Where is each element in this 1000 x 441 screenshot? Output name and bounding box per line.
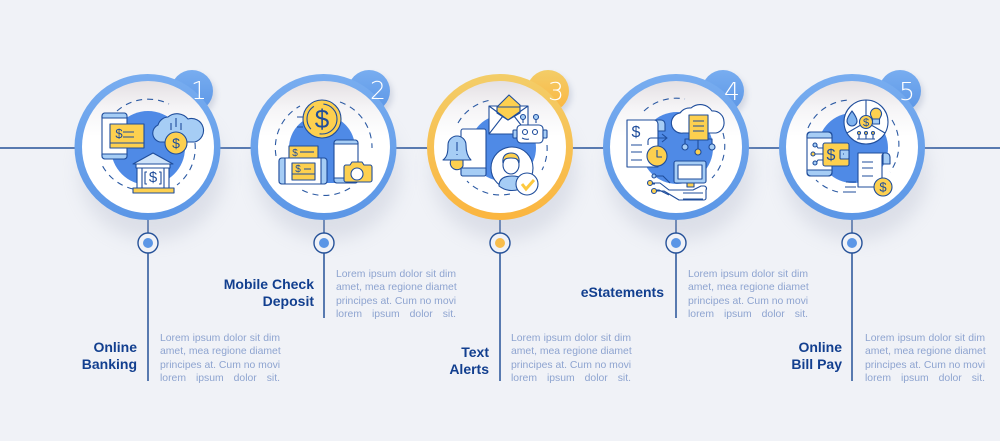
text block: Mobile Check Deposit: lorem ipsum dolor sit.	[336, 309, 456, 320]
timeline marker 2	[314, 233, 334, 253]
text block: Online Bill Pay: lorem ipsum dolor sit.	[865, 373, 985, 384]
text block: Online Banking	[160, 333, 281, 384]
step 2 circle: Mobile Check Deposit: $	[315, 104, 330, 134]
timeline marker 1	[138, 233, 158, 253]
step 3 circle: Text Alerts: 3	[548, 77, 564, 106]
step 2 circle: Mobile Check Deposit: $	[295, 164, 301, 175]
heading: Mobile Check Deposit: Deposit	[263, 292, 314, 308]
step 4 circle: eStatements: $	[632, 124, 641, 141]
step 5 circle: Online Bill Pay: 5	[899, 77, 915, 106]
text block: Online Bill Pay: amet, mea regione diamet	[865, 346, 986, 357]
step 1 circle: Online Banking: 1	[191, 76, 207, 105]
icon: coin, check, phones and camera	[279, 100, 372, 184]
text block: Online Bill Pay: principes at. Cum no movi	[865, 360, 985, 371]
text block: Online Bill Pay	[865, 333, 986, 384]
step 3 circle: Text Alerts	[427, 70, 576, 240]
icon: phone, card, cloud coin and bank	[102, 113, 204, 193]
step 4 circle: eStatements: 4	[724, 77, 740, 106]
text block: Mobile Check Deposit: amet, mea regione diamet	[336, 282, 457, 293]
step 2 circle: Mobile Check Deposit: $	[292, 148, 298, 159]
text block: eStatements: amet, mea regione diamet	[688, 282, 809, 293]
icon: envelope, bell, phone, robot and person	[443, 95, 547, 195]
step 1 circle: Online Banking: $	[172, 135, 180, 151]
heading: Text Alerts	[449, 344, 489, 376]
text block: Text Alerts	[511, 333, 632, 384]
timeline marker 3	[490, 233, 510, 253]
heading: Online Bill Pay: Bill Pay	[791, 356, 842, 372]
text block: eStatements: principes at. Cum no movi	[688, 296, 808, 307]
heading: Online Banking	[82, 339, 137, 372]
text block: Text Alerts: Lorem ipsum dolor sit dim	[511, 333, 631, 344]
text block: Online Bill Pay: Lorem ipsum dolor sit dim	[865, 333, 985, 344]
heading: Online Banking: Banking	[82, 356, 137, 372]
icon: phone wallet, utilities chart, bill and coin	[807, 100, 892, 196]
heading: eStatements: eStatements	[581, 284, 664, 300]
step 1 circle: Online Banking	[74, 70, 224, 240]
text block: Online Banking: principes at. Cum no movi	[160, 360, 280, 371]
heading: Mobile Check Deposit	[224, 276, 314, 309]
heading: Text Alerts: Text	[461, 344, 489, 360]
step 1 circle: Online Banking: $	[115, 126, 123, 141]
text block: Text Alerts: amet, mea regione diamet	[511, 346, 632, 357]
step 5 circle: Online Bill Pay: $	[879, 180, 887, 194]
text block: Mobile Check Deposit: principes at. Cum no movi	[336, 296, 456, 307]
heading: Text Alerts: Alerts	[449, 360, 489, 376]
text block: Online Banking: lorem ipsum dolor sit.	[160, 373, 280, 384]
step 2 circle: Mobile Check Deposit	[250, 70, 400, 240]
heading: Online Bill Pay	[791, 339, 842, 372]
heading: Mobile Check Deposit: Mobile Check	[224, 276, 314, 292]
text block: Text Alerts: lorem ipsum dolor sit.	[511, 373, 631, 384]
text block: Mobile Check Deposit	[336, 269, 457, 320]
text block: Text Alerts: principes at. Cum no movi	[511, 360, 631, 371]
step 4 circle: eStatements	[603, 70, 752, 240]
step 5 circle: Online Bill Pay: $	[827, 147, 836, 164]
text block: eStatements: Lorem ipsum dolor sit dim	[688, 269, 808, 280]
text block: eStatements	[688, 269, 809, 320]
step 5 circle: Online Bill Pay: $	[863, 117, 869, 129]
text block: Mobile Check Deposit: Lorem ipsum dolor sit dim	[336, 269, 456, 280]
timeline marker 4	[666, 233, 686, 253]
timeline marker 5	[842, 233, 862, 253]
text block: Online Banking: amet, mea regione diamet	[160, 346, 281, 357]
text block: eStatements: lorem ipsum dolor sit.	[688, 309, 808, 320]
step 2 circle: Mobile Check Deposit: 2	[370, 76, 386, 105]
heading: Online Bill Pay: Online	[798, 339, 842, 355]
icon: statement, clock, cloud, monitor and hand	[627, 105, 724, 200]
step 1 circle: Online Banking: $	[149, 169, 158, 186]
step 5 circle: Online Bill Pay	[779, 70, 928, 240]
heading: Online Banking: Online	[93, 339, 137, 355]
text block: Online Banking: Lorem ipsum dolor sit dim	[160, 333, 280, 344]
